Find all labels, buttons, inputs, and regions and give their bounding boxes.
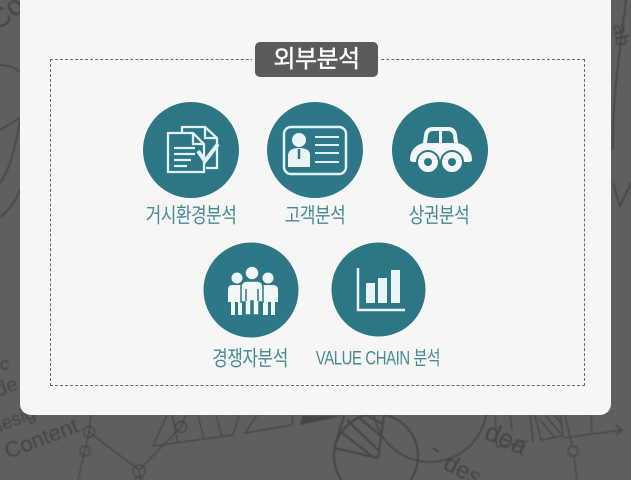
- icon: id card: [267, 102, 363, 198]
- icon: documents with check: [143, 102, 239, 198]
- label: 거시환경분석: [146, 204, 236, 227]
- background: sketch pattern: Content: [1, 413, 82, 464]
- panel: dashed frame: [50, 59, 585, 386]
- label: 고객분석: [285, 204, 345, 227]
- heading tag: 외부분석: [255, 42, 378, 77]
- icon: three people: [204, 242, 298, 338]
- background: sketch pattern: c: [0, 354, 9, 374]
- icon: car: [392, 102, 488, 198]
- heading tag: 외부분석: 외부분석: [274, 46, 359, 73]
- icon: bar chart: [332, 242, 426, 336]
- label: 경쟁자분석: [212, 347, 288, 370]
- background: sketch pattern: dea: [481, 416, 533, 461]
- label: VALUE CHAIN 분석: [316, 348, 440, 369]
- label: 상권분석: [409, 204, 469, 227]
